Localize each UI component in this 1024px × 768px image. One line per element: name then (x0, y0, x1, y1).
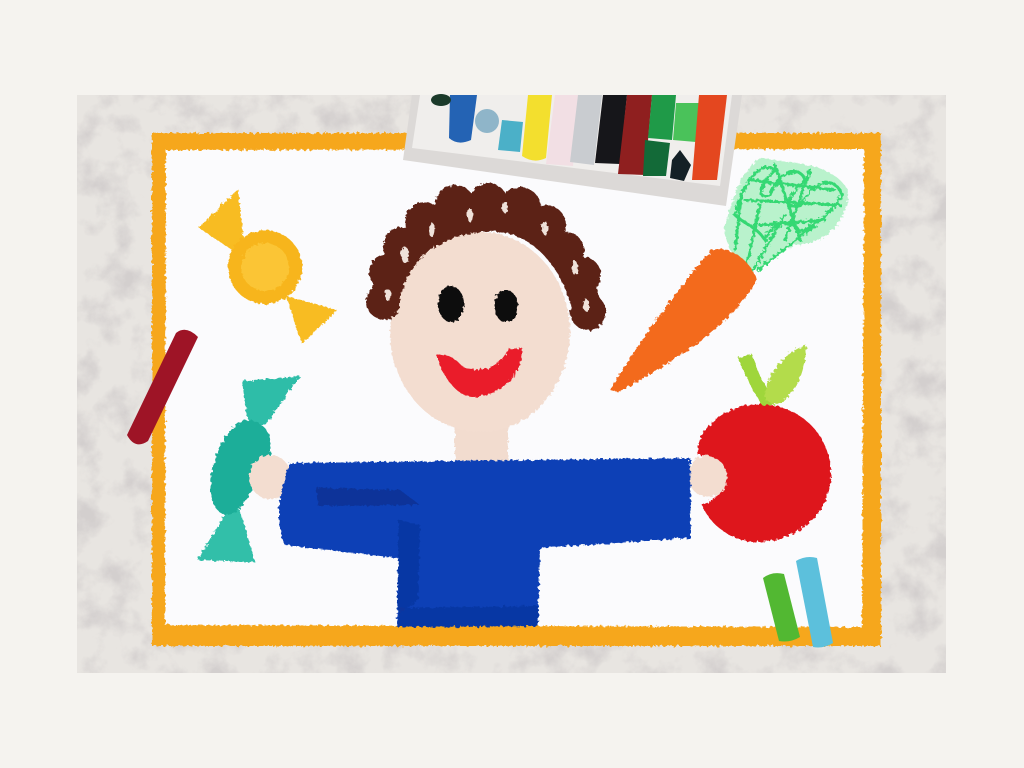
icon: boy's neck (455, 410, 508, 462)
hair highlights (385, 201, 589, 311)
icon: boy's curly hair (366, 183, 606, 330)
icon: hands (249, 455, 728, 499)
icon: apple leaf and stem (738, 345, 806, 405)
panel: marble surface (77, 95, 946, 673)
icon: boy's blue sweater (279, 458, 691, 627)
icon: boy's head (390, 232, 570, 432)
panel: drawing paper with orange border (152, 133, 881, 646)
icon: red crayon (127, 330, 198, 444)
sweater shading (316, 488, 538, 627)
icon: boy's eyes (438, 286, 518, 322)
crayons in the box (431, 94, 727, 181)
icon: boy's smile (437, 348, 522, 397)
icon: orange carrot (610, 249, 757, 392)
icon: blue chalk (796, 557, 833, 648)
icon: crayon box (403, 94, 742, 206)
icon: green chalk (763, 573, 800, 642)
icon: green candy (197, 376, 300, 562)
icon: carrot greens (724, 157, 848, 272)
icon: red apple (698, 404, 831, 542)
icon: yellow candy (199, 189, 337, 344)
